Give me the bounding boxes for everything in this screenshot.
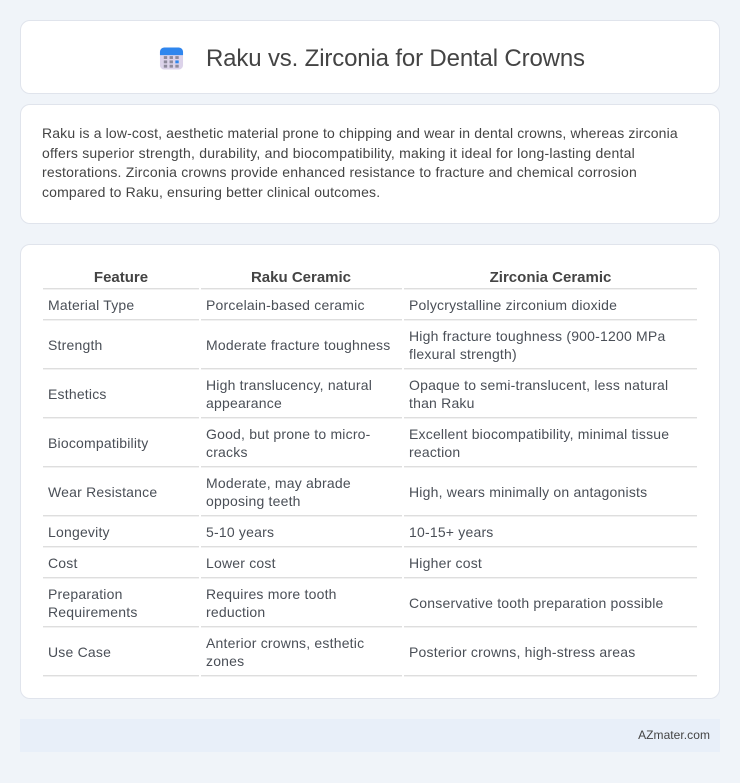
row: wear resistance: opposing teeth	[206, 493, 301, 509]
row: esthetics: Opaque to semi-translucent, less natural	[409, 377, 668, 393]
row: material type	[43, 297, 697, 321]
row: cost	[43, 555, 697, 579]
row: material type: Porcelain-based ceramic	[206, 297, 365, 313]
row: wear resistance: High, wears minimally on antagonists	[409, 484, 647, 500]
intro text: Raku is a low-cost, aesthetic material prone to chipping and wear in dental crowns, whereas zirconia	[42, 125, 678, 141]
row: biocompatibility: Excellent biocompatibility, minimal tissue	[409, 426, 669, 442]
row: preparation requirements	[43, 586, 697, 628]
row: longevity	[43, 524, 697, 548]
table header: Raku Ceramic	[251, 269, 351, 286]
row: strength: Moderate fracture toughness	[206, 337, 390, 353]
panel: introduction	[20, 104, 720, 224]
panel: comparison table	[20, 244, 720, 699]
row: strength: Strength	[48, 337, 103, 353]
row: use case: Anterior crowns, esthetic	[206, 635, 364, 651]
row: biocompatibility: cracks	[206, 444, 248, 460]
row: wear resistance	[43, 475, 697, 517]
row: longevity: Longevity	[48, 524, 110, 540]
row: longevity: 10-15+ years	[409, 524, 494, 540]
row: esthetics: than Raku	[409, 395, 475, 411]
row: preparation requirements: Requirements	[48, 604, 138, 620]
row: biocompatibility: Good, but prone to micro-	[206, 426, 371, 442]
row: material type: Polycrystalline zirconium dioxide	[409, 297, 617, 313]
row: biocompatibility	[43, 426, 697, 468]
table header: Zirconia Ceramic	[490, 269, 611, 286]
row: esthetics: Esthetics	[48, 386, 107, 402]
row: cost: Cost	[48, 555, 78, 571]
row: esthetics: appearance	[206, 395, 282, 411]
row: preparation requirements: Requires more tooth	[206, 586, 337, 602]
panel: title	[20, 20, 720, 94]
row: use case: Posterior crowns, high-stress areas	[409, 644, 635, 660]
table header: Feature	[94, 269, 148, 286]
row: strength	[43, 328, 697, 370]
row: material type: Material Type	[48, 297, 134, 313]
row: longevity: 5-10 years	[206, 524, 274, 540]
row: strength: flexural strength)	[409, 346, 517, 362]
row: biocompatibility: Biocompatibility	[48, 435, 148, 451]
row: wear resistance: Moderate, may abrade	[206, 475, 351, 491]
intro text: offers superior strength, durability, and biocompatibility, making it ideal for long-lasting dental	[42, 145, 635, 161]
row: preparation requirements: Conservative tooth preparation possible	[409, 595, 664, 611]
row: esthetics: High translucency, natural	[206, 377, 372, 393]
row: cost: Lower cost	[206, 555, 276, 571]
intro text	[42, 125, 678, 200]
row: preparation requirements: reduction	[206, 604, 265, 620]
intro text: compared to Raku, ensuring better clinical outcomes.	[42, 184, 380, 200]
icon: calendar	[160, 48, 184, 70]
row: use case	[43, 635, 697, 677]
table header	[43, 269, 697, 290]
footer bar	[20, 719, 720, 752]
row: cost: Higher cost	[409, 555, 482, 571]
row: use case: zones	[206, 653, 244, 669]
row: wear resistance: Wear Resistance	[48, 484, 157, 500]
title text: Raku vs. Zirconia for Dental Crowns	[206, 45, 585, 72]
intro text: restorations. Zirconia crowns provide enhanced resistance to fracture and chemical corrosion	[42, 164, 637, 180]
row: esthetics	[43, 377, 697, 419]
footer source text: AZmater.com	[638, 728, 710, 742]
row: strength: High fracture toughness (900-1200 MPa	[409, 328, 665, 344]
row: biocompatibility: reaction	[409, 444, 460, 460]
row: use case: Use Case	[48, 644, 111, 660]
row: preparation requirements: Preparation	[48, 586, 123, 602]
